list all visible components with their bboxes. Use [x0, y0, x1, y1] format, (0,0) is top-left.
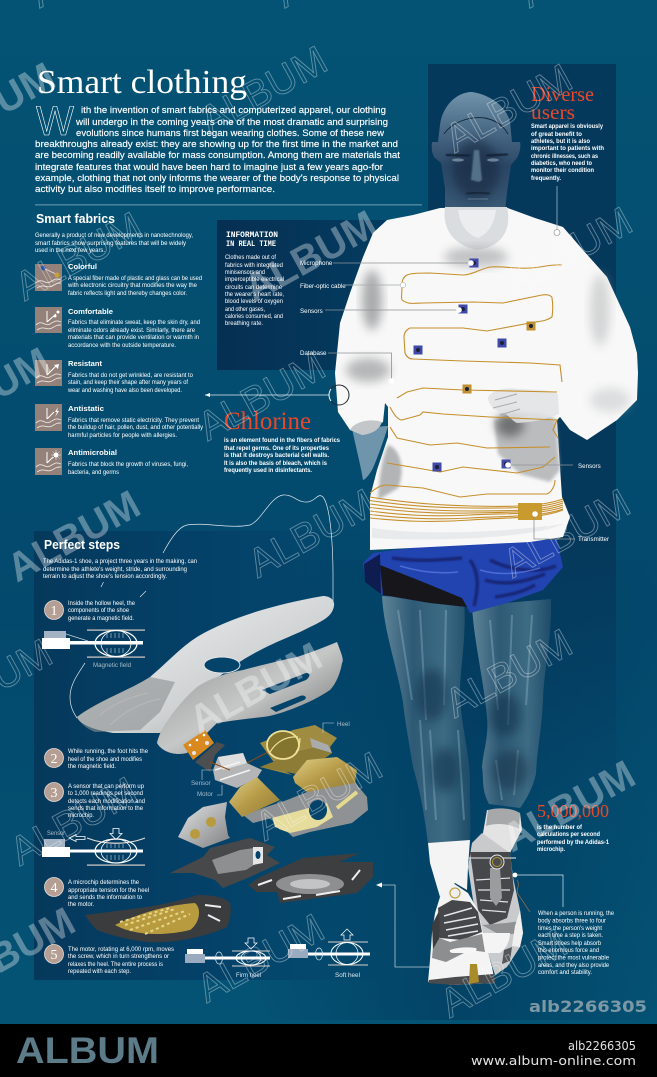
label: motor: Motor [197, 791, 213, 798]
footer credit: alb2266305 [568, 1038, 636, 1053]
label: microphone: Microphone [300, 260, 333, 267]
chlorine callout: that repel germs. One of its properties [224, 445, 330, 452]
label: transmitter [532, 511, 609, 543]
antistatic text: the buildup of hair, pollen, dust, and other potentially [68, 424, 204, 431]
step 3: 3 [50, 786, 58, 801]
step 5: repeated with each step. [68, 968, 131, 975]
colorful text: with electronic circuitry that modifies the way the [67, 282, 198, 289]
panel: smart fabrics [35, 212, 204, 476]
watermark: ALBUM repeats: ALBUM [438, 56, 580, 161]
comfortable text: accordance with the outside temperature. [68, 342, 176, 349]
label: database: Database [300, 350, 327, 357]
colorful text: A special fiber made of plastic and glass can be used [68, 275, 203, 282]
info text: breathing rate. [225, 320, 263, 327]
forearm [352, 426, 388, 480]
running leader line [513, 873, 563, 907]
running text block: Smart shoes help absorb [538, 940, 602, 947]
running text block: protect the most vulnerable [538, 954, 610, 962]
icon: comfortable [35, 307, 62, 333]
5,000,000 callout: microchip. [537, 846, 565, 853]
smart fabrics intro: used in the next few years. [35, 247, 105, 254]
intro text block: are becoming readily available for mass consumption. Among them are materials that [35, 150, 400, 161]
transmitter [518, 503, 542, 520]
step 1: Inside the hollow heel, the [68, 600, 136, 607]
diverse users callout: monitor their condition [531, 167, 594, 174]
resistant text: stain, and keep their shape after many years of [68, 379, 188, 386]
smart fabrics intro: Generally a product of new developments in nanotechnology, [35, 232, 193, 239]
chlorine callout: frequently used in disinfectants. [224, 467, 312, 474]
watermark: ALBUM repeats: ALBUM [0, 482, 148, 591]
resistant text: Fabrics that do not get wrinkled, are resistant to [68, 372, 194, 379]
label: sensor: Sensor [191, 780, 211, 787]
comfortable text: Fabrics that eliminate sweat, keep the skin dry, and [68, 319, 201, 326]
chlorine callout: is an element found in the fibers of fabrics [224, 437, 341, 444]
info text: minisensors and [225, 269, 265, 276]
illustration: runner [335, 92, 638, 985]
intro text block: breakthroughs already exist: they are showing up for the first time in the market and [35, 139, 398, 150]
info text [225, 254, 284, 327]
running text block: body absorbs three to four [538, 918, 606, 924]
diagram: soft heel [288, 929, 370, 979]
arrow: shoe explosion to foot [376, 882, 430, 967]
running text block: times the person's weight [538, 925, 602, 932]
perfect steps intro: determine the athlete's weight, stride, and surrounding [43, 566, 188, 573]
diverse users callout: diabetics, who need to [531, 160, 592, 167]
shoe part: gold studded sole [85, 895, 231, 942]
shorts [363, 540, 563, 613]
heading: perfect steps: Perfect steps [44, 538, 120, 552]
step 1: generate a magnetic field. [68, 615, 134, 622]
step 5: The motor, rotating at 6,000 rpm, moves [68, 946, 174, 953]
footer credit [471, 1038, 636, 1068]
colorful text: Colorful [68, 262, 97, 271]
comfortable text: eliminate odors already exist. Similarly, there are [68, 327, 196, 334]
step 5: the screw, which in turn strengthens or [68, 953, 169, 960]
step 1: 1 [50, 604, 58, 619]
step 5: relaxes the heel. The entire process is [68, 961, 163, 968]
footer credit: www.album-online.com [471, 1053, 636, 1068]
info heading [226, 231, 278, 249]
arrow: fabric callout to sleeve [205, 385, 349, 405]
intro text block: will undergo in the coming years one of the most dramatic and surprising [75, 117, 388, 128]
panel: perfect steps [42, 495, 373, 979]
info text: blood levels of oxygen [225, 298, 284, 305]
antimicrobial text: bacteria, and germs [68, 469, 119, 476]
shoe part: grey heel cage [157, 642, 343, 754]
label: database [300, 350, 394, 384]
diagram: soft heel: Soft heel [335, 972, 360, 979]
running text block: this enormous force and [538, 947, 600, 954]
info text: the wearer's heart rate, [225, 291, 284, 298]
step 2: 2 [50, 752, 58, 767]
running text block: comfort and stability. [538, 969, 592, 976]
watermark: ALBUM repeats: ALBUM [191, 344, 333, 449]
step 3: detects each modification and [68, 798, 146, 805]
diverse users callout: users [531, 100, 575, 124]
watermark: ALBUM repeats: ALBUM [496, 481, 638, 586]
diagram: magnetic field [42, 630, 145, 669]
gold heel coil [260, 725, 337, 775]
perfect steps intro: The Adidas-1 shoe, a project three years in the making, can [43, 558, 198, 565]
info heading: INFORMATION [226, 231, 278, 240]
perfect steps intro: terrain to adjust the shoe's tension accordingly. [43, 573, 167, 580]
socks [428, 808, 522, 897]
hand [488, 388, 559, 423]
antistatic text [68, 404, 204, 439]
label: sensor [191, 770, 213, 787]
chlorine callout: is that it destroys bacterial cell walls. [224, 452, 329, 459]
label: sensors right: Sensors [578, 463, 601, 470]
label: fiber-optic cable: Fiber-optic cable [300, 283, 346, 290]
label: microphone [300, 260, 474, 267]
step 4: A microchip determines the [68, 879, 140, 886]
circuit wiring [370, 265, 563, 521]
resistant text: wear and washing have also been developed. [67, 387, 182, 394]
shoe part: silver midsole with gold studs [178, 802, 230, 848]
label: heel [323, 721, 350, 733]
info text: fabrics with integrated [225, 262, 284, 269]
info text: calories consumed, and [225, 313, 283, 320]
comfortable text: Comfortable [68, 307, 113, 316]
intro text block: example, clothing that not only informs the wearer of the body's response to physical [35, 173, 399, 184]
intro text block: activity but also modifies itself to improve performance. [35, 184, 275, 195]
diverse users callout: Diverse [531, 82, 594, 106]
5,000,000 callout: calculations per second [537, 831, 600, 838]
comfortable text: materials that can provide ventilation or warmth in [68, 334, 200, 341]
step 1: components of the shoe [68, 607, 130, 614]
diverse users leader [554, 186, 560, 236]
step 1 [44, 600, 136, 622]
leader: thin curve to shoe [163, 495, 333, 603]
panel: perfect steps background [34, 531, 384, 980]
watermark: ALBUM repeats: ALBUM [241, 481, 383, 586]
comfortable text [68, 307, 201, 349]
5,000,000 callout: performed by the Adidas-1 [537, 839, 610, 846]
step 3: microchip. [68, 812, 94, 819]
label: sensors left: Sensors [300, 308, 323, 315]
watermark: ALBUM repeats: ALBUM [248, 744, 390, 849]
diagram: firm heel [185, 938, 270, 979]
intro text block [35, 97, 400, 195]
resistant text: Resistant [68, 359, 102, 368]
label: heel: Heel [337, 721, 350, 728]
step 2: While running, the foot hits the [68, 748, 149, 755]
leader: thin curve left [70, 582, 146, 718]
panel: right dark column [428, 64, 616, 804]
label: sensors left [300, 307, 462, 315]
5,000,000 callout: 5,000,000 [537, 801, 609, 821]
diverse users callout: frequently. [531, 175, 561, 182]
info text: imperceptible electrical [225, 276, 284, 283]
intro text block: ith the invention of smart fabrics and computerized apparel, our clothing [81, 105, 386, 116]
title: Smart clothing [37, 64, 247, 101]
step 2: the magnetic field. [68, 763, 116, 770]
image id tag: alb2266305 [529, 997, 647, 1016]
5,000,000 callout [537, 801, 610, 853]
icon: antistatic [35, 404, 62, 431]
colorful text [67, 262, 203, 297]
step 2 [44, 748, 149, 770]
circuit board [183, 730, 214, 760]
colorful text: fabric reflects light and thereby changes color. [68, 290, 187, 297]
central dark band [250, 560, 657, 1020]
watermark: ALBUM repeats: ALBUM [498, 199, 640, 304]
diverse users callout: chronic illnesses, such as [531, 153, 598, 160]
resistant text [67, 359, 194, 394]
icon: resistant [35, 360, 62, 386]
shoe part: dark midsole [170, 838, 280, 888]
label: sensors right [505, 462, 601, 470]
watermark: ALBUM repeats: ALBUM [237, 202, 385, 311]
step 5 [44, 944, 174, 975]
diagram: magnetic field: Magnetic field [93, 662, 132, 669]
watermark: ALBUM repeats: ALBUM [495, 752, 643, 861]
step 3: to 1,000 readings per second [68, 790, 144, 797]
shoe part: white top insole [77, 596, 334, 733]
antimicrobial text [68, 448, 188, 476]
intro text block: W [36, 97, 74, 144]
shoe part: dark sole [248, 853, 373, 903]
panel: information in real time [217, 220, 387, 370]
antistatic text: Antistatic [68, 404, 104, 413]
info text: circuits can determine [225, 284, 283, 291]
diverse users callout: of great benefit to [531, 131, 582, 138]
step 2: heel of the shoe and modifies [68, 756, 142, 763]
watermark: ALBUM repeats: ALBUM [190, 906, 332, 1011]
running text block [538, 910, 615, 976]
watermark: ALBUM repeats: ALBUM [182, 634, 330, 743]
diagram: firm heel: Firm heel [236, 972, 261, 979]
5,000,000 callout: is the number of [537, 824, 583, 831]
running text block: areas, and they also provide [538, 962, 609, 969]
smart fabrics intro: smart fabrics show surprising features that will be widely [35, 240, 187, 247]
label: transmitter: Transmitter [578, 536, 609, 543]
heading: smart fabrics: Smart fabrics [36, 212, 115, 226]
sensor and motor [195, 742, 270, 788]
antimicrobial text: Fabrics that block the growth of viruses, fungi, [68, 461, 188, 468]
step 3 [44, 782, 146, 819]
antistatic text: harmful particles for people with allergies. [68, 432, 177, 439]
watermark: ALBUM repeats: ALBUM [193, 38, 335, 143]
info heading: IN REAL TIME [226, 240, 276, 249]
diverse users callout: Smart apparel is obviously [531, 123, 604, 130]
chlorine callout [224, 408, 341, 474]
antistatic text: Fabrics that remove static electricity. They prevent [68, 417, 199, 424]
runner head [432, 92, 520, 212]
diverse users callout: athletes, but it is also [531, 138, 590, 145]
shoe: front [428, 883, 495, 985]
diagram: sensor [42, 828, 145, 866]
illustration: exploded shoe [77, 596, 373, 942]
shoe: back [468, 833, 530, 975]
shirt [335, 207, 638, 550]
intro text block: integrate features that would have been hard to imagine just a few years ago-for [35, 162, 383, 173]
step 5: 5 [50, 948, 58, 963]
chlorine callout: Chlorine [224, 408, 311, 435]
icon: antimicrobial [35, 448, 62, 475]
diverse users callout [531, 82, 604, 182]
footer logo: ALBUM [16, 1030, 159, 1071]
step 4 [44, 878, 149, 908]
footer bar [0, 1024, 657, 1077]
runner legs [382, 596, 551, 844]
running text block: When a person is running, the [538, 910, 615, 917]
shirt labels and leaders [300, 260, 609, 543]
diverse users callout: important to patients with [531, 145, 604, 152]
running text block: each time a step is taken. [538, 932, 603, 939]
chlorine callout: It is also the basis of bleach, which is [224, 460, 328, 467]
watermark: ALBUM repeats: ALBUM [438, 621, 580, 726]
step 4: the motor. [68, 901, 94, 908]
step 4: and sends the information to [68, 894, 143, 901]
watermark: ALBUM repeats: ALBUM [8, 204, 150, 309]
watermark: ALBUM repeats: ALBUM [433, 921, 575, 1026]
gold heel body [229, 757, 368, 837]
info text: Clothes made out of [225, 254, 276, 261]
antimicrobial text: Antimicrobial [68, 448, 117, 457]
sensors [414, 258, 536, 472]
perfect steps intro [43, 558, 198, 580]
icon: colorful [35, 264, 62, 291]
info text: and other gases, [225, 306, 265, 313]
intro text block: evolutions since humans first began wearing clothes. Some of these new [76, 128, 384, 139]
diagram: sensor: Sensor [47, 830, 65, 837]
label: fiber-optic cable [300, 282, 406, 290]
step 3: A sensor that can perform up [68, 783, 145, 790]
step 4: 4 [50, 881, 58, 896]
label: motor [197, 785, 222, 798]
step 3: sends that information to the [68, 805, 144, 812]
step 4: appropriate tension for the heel [68, 887, 149, 894]
watermark: ALBUM repeats: ALBUM [3, 769, 145, 874]
smart fabrics intro [35, 232, 193, 254]
